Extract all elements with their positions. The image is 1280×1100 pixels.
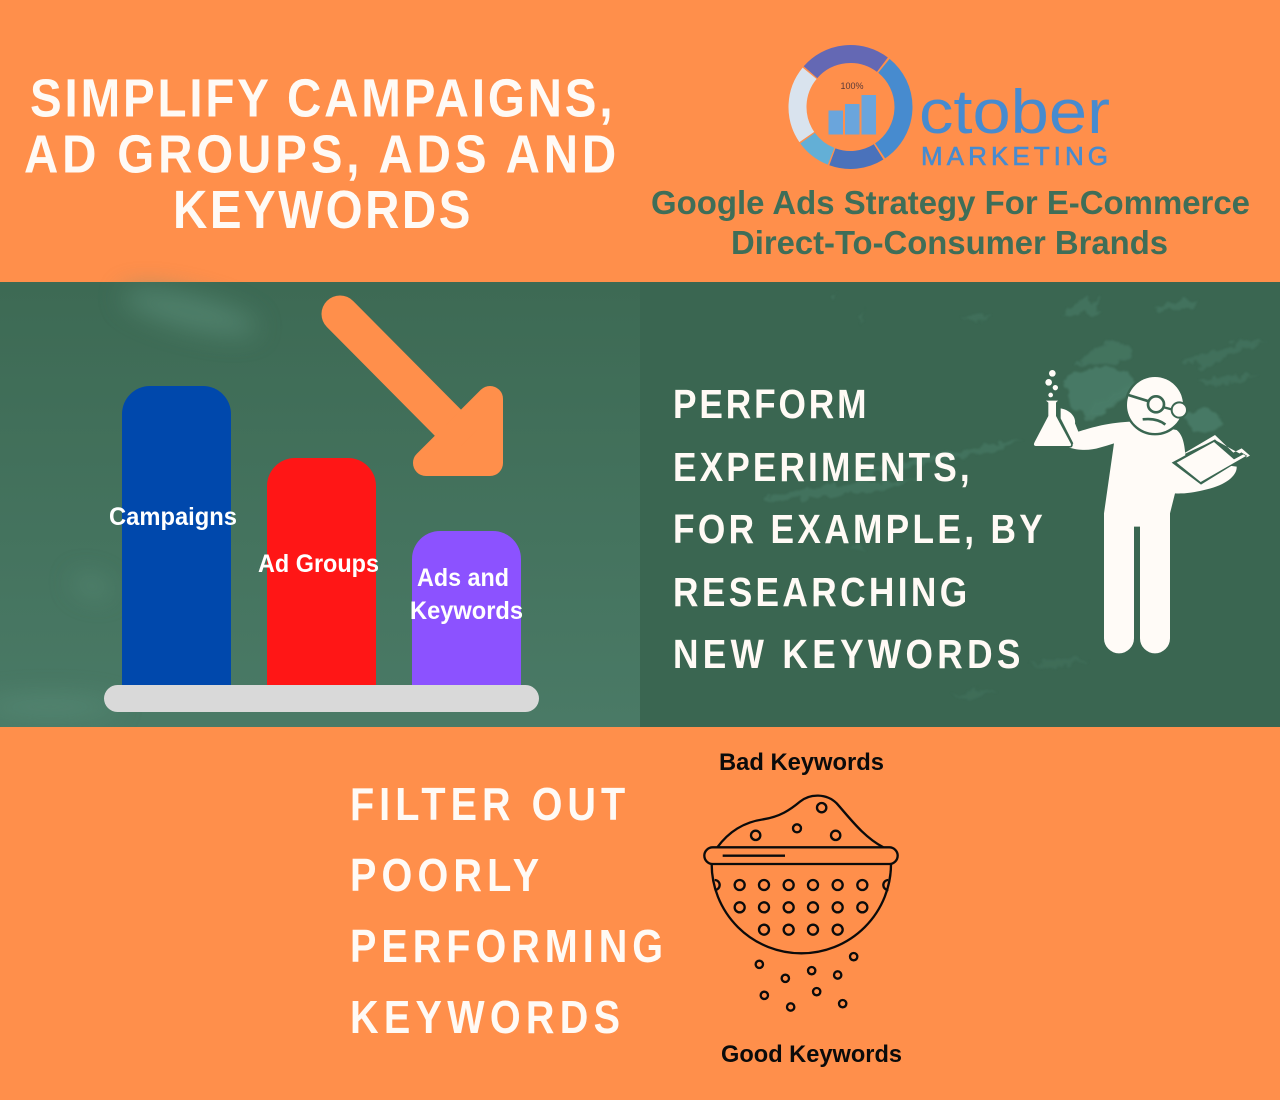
bar: Ads and Keywords: Keywords <box>410 597 523 625</box>
bar: Campaigns: Campaigns <box>109 503 237 531</box>
bar: Ads and Keywords <box>410 531 523 685</box>
panel: logo and title <box>640 0 1280 282</box>
bar: Ad Groups: Ad Groups <box>258 550 379 578</box>
bar: Campaigns <box>109 386 237 685</box>
chart base <box>104 685 539 712</box>
text: filter out poorly performing keywords <box>350 779 663 1044</box>
heading: simplify campaigns <box>24 68 616 240</box>
title: Google Ads strategy <box>651 184 1250 261</box>
heading: simplify campaigns: SIMPLIFY CAMPAIGNS, <box>30 68 613 128</box>
text: filter out poorly performing keywords: FILTER OUT <box>350 779 625 831</box>
logo wordmark <box>919 78 1110 171</box>
text: perform experiments <box>673 382 1043 678</box>
panel: simplify heading <box>0 0 640 282</box>
text: perform experiments: PERFORM <box>673 382 867 428</box>
arrow: downward trend <box>340 314 490 463</box>
text: filter out poorly performing keywords: PERFORMING <box>350 921 663 973</box>
label: bad keywords: Bad Keywords <box>719 749 884 776</box>
icon: scientist with flask and book <box>1034 370 1250 653</box>
text: filter out poorly performing keywords: POORLY <box>350 850 539 902</box>
text: filter out poorly performing keywords: KEYWORDS <box>350 992 620 1044</box>
logo wordmark: MARKETING <box>921 141 1108 171</box>
heading: simplify campaigns: AD GROUPS, ADS AND <box>24 124 616 184</box>
title: Google Ads strategy: Direct-To-Consumer Brands <box>731 224 1168 261</box>
label: good keywords: Good Keywords <box>721 1041 902 1068</box>
text: perform experiments: NEW KEYWORDS <box>673 632 1020 678</box>
heading: simplify campaigns: KEYWORDS <box>173 179 470 240</box>
text: perform experiments: RESEARCHING <box>673 570 967 616</box>
icon: October Marketing logo ring: 100% <box>840 81 864 91</box>
panel: filter out keywords <box>0 727 1280 1100</box>
logo wordmark: ctober <box>919 78 1110 147</box>
icon: October Marketing logo ring <box>797 54 903 160</box>
bar: Ads and Keywords: Ads and <box>417 564 509 592</box>
panel: hierarchy bar chart <box>0 280 640 727</box>
text: perform experiments: FOR EXAMPLE, BY <box>673 507 1043 553</box>
panel: perform experiments <box>640 282 1280 727</box>
icon: sieve filtering keywords <box>704 796 898 1011</box>
text: perform experiments: EXPERIMENTS, <box>673 445 970 491</box>
bar: Ad Groups <box>258 458 379 685</box>
title: Google Ads strategy: Google Ads Strategy For E-Commerce <box>651 184 1250 221</box>
